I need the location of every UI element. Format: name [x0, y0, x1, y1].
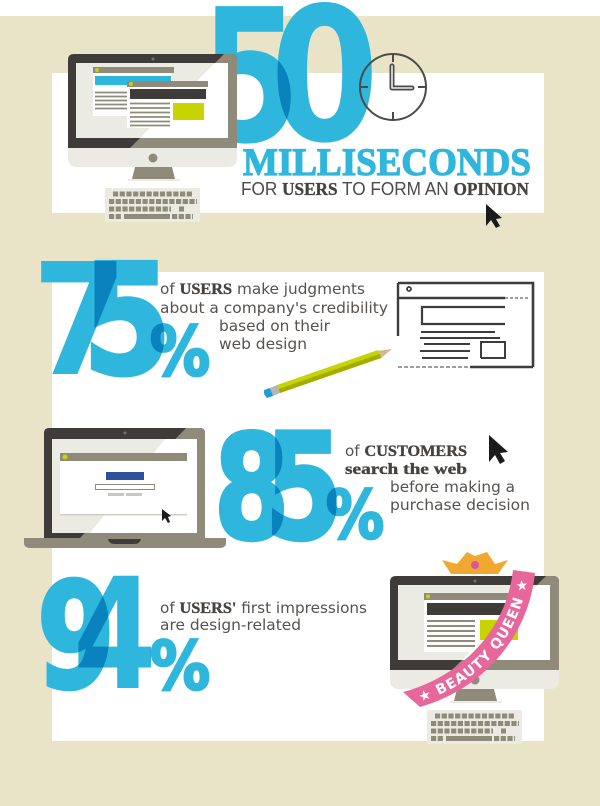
- stat: 94%: %: [150, 627, 210, 705]
- icon: crown: [442, 552, 508, 574]
- icon: desktop computer with overlapping windows: [68, 54, 237, 222]
- stat: 94%: [37, 545, 210, 725]
- text: 75% description: about a company's credibility: [160, 299, 388, 317]
- stat: 75%: %: [150, 312, 210, 392]
- stat: 85%: %: [326, 476, 384, 554]
- stat: 75%: 7: [32, 231, 127, 411]
- stat: 75%: [32, 231, 210, 411]
- icon: cursor: [486, 204, 502, 228]
- stat: 85%: 8: [214, 406, 289, 573]
- text: 75% description: based on their: [219, 317, 331, 335]
- text: 75% description: of USERS make judgments: [160, 280, 365, 298]
- icon: clock: [360, 54, 426, 120]
- panel: top white band: [52, 73, 544, 213]
- stat: 85%: [214, 402, 384, 573]
- text: 75% description: web design: [219, 335, 307, 353]
- stat: 75%: 5: [83, 233, 171, 410]
- text: 85% description: purchase decision: [390, 496, 530, 514]
- icon: laptop: [24, 428, 226, 548]
- subheading: FOR USERS TO FORM AN OPINION: [241, 179, 529, 199]
- text: 94% description: are design-related: [160, 616, 301, 634]
- stat: 85%: 5: [265, 402, 343, 573]
- text: 85% description: [345, 442, 530, 514]
- icon: desktop computer with beauty queen sash: ★ BEAUTY QUEEN ★: [419, 580, 527, 701]
- panel: statistics white band: [52, 272, 544, 741]
- text: 75% description: [160, 280, 388, 353]
- big number 50: [200, 0, 379, 186]
- icon: hand-drawn wireframe: [398, 283, 533, 367]
- text: 85% description: before making a: [390, 478, 515, 496]
- text: 94% description: [160, 599, 367, 634]
- icon: pencil: [264, 349, 392, 398]
- text: 85% description: of CUSTOMERS: [345, 442, 467, 460]
- icon: desktop computer with beauty queen sash: [390, 570, 559, 744]
- icon: cursor: [489, 435, 508, 464]
- text: 85% description: search the web: [345, 461, 467, 478]
- stat: 94%: 4: [73, 545, 157, 725]
- stat: 94%: 9: [37, 551, 115, 722]
- heading: MILLISECONDS: MILLISECONDS: [243, 141, 531, 184]
- text: 94% description: of USERS' first impressions: [160, 599, 367, 617]
